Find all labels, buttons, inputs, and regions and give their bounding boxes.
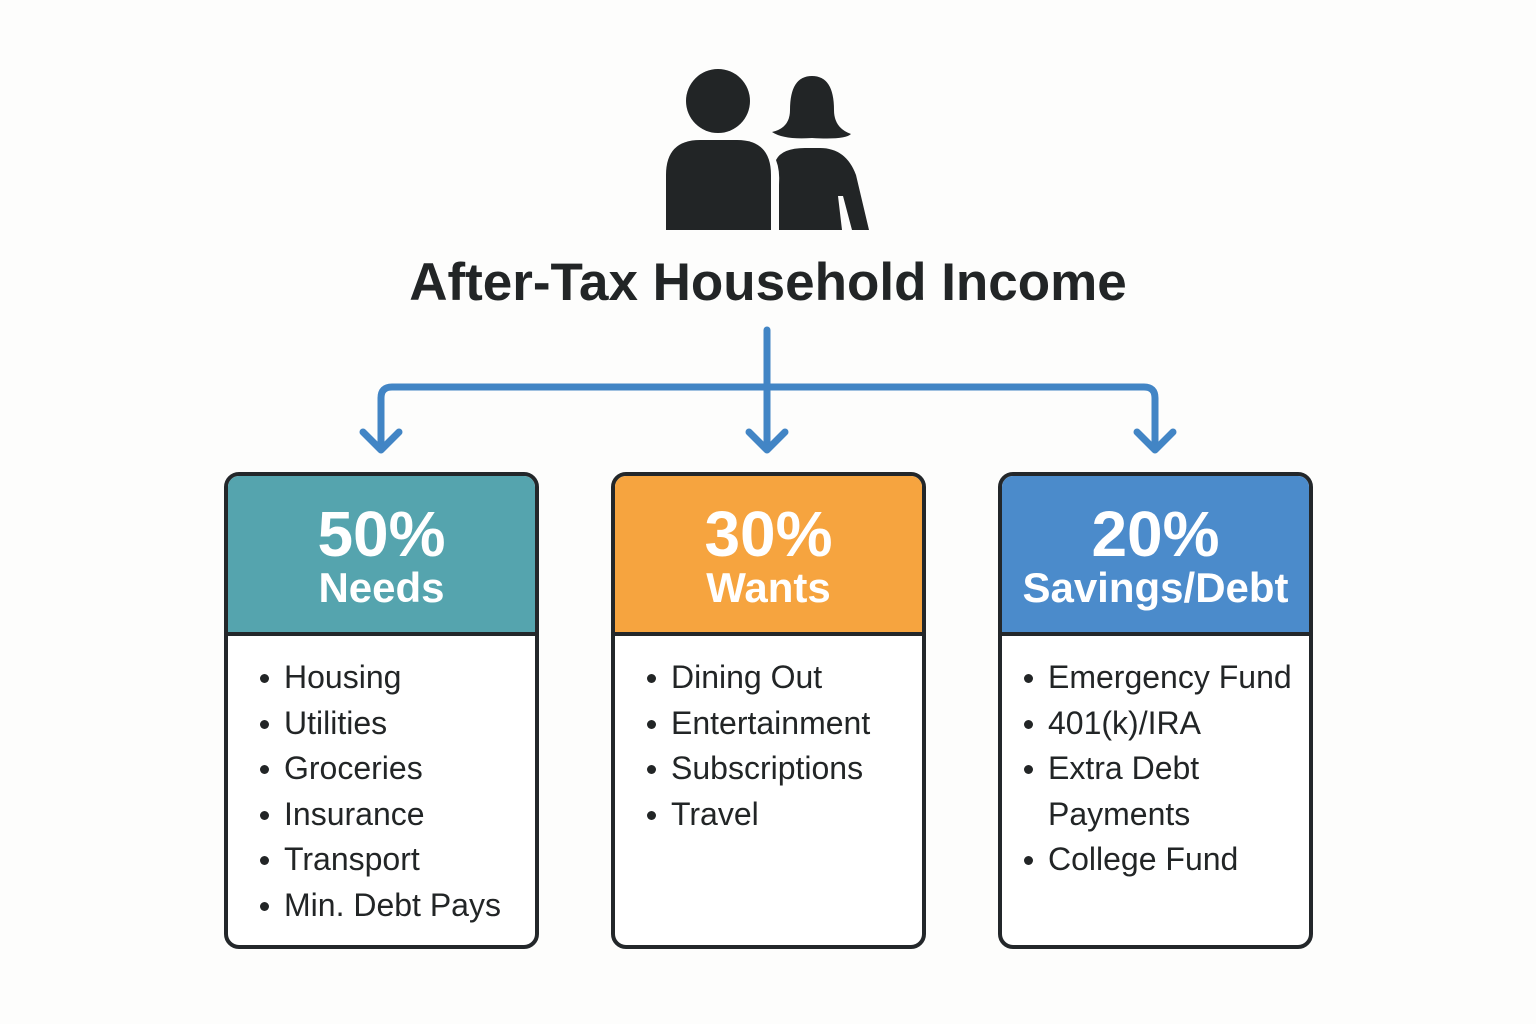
panel: needs: Needs — [318, 564, 445, 611]
panel: needs: Transport — [284, 841, 420, 877]
panel: needs: Housing — [284, 659, 401, 695]
panel: savings/debt: College Fund — [1048, 841, 1238, 877]
panel: wants — [611, 472, 926, 949]
panel: wants: Travel — [671, 796, 759, 832]
panel: needs: Insurance — [284, 796, 425, 832]
panel: needs: Groceries — [284, 750, 423, 786]
panel: wants: Subscriptions — [671, 750, 863, 786]
panel: savings/debt: 401(k)/IRA — [1048, 704, 1201, 740]
panel: needs: Utilities — [284, 704, 387, 740]
panel: savings/debt: Savings/Debt — [1022, 564, 1289, 611]
panel: savings/debt: 20% — [1091, 498, 1220, 570]
icon: household people — [666, 69, 869, 230]
panel: wants: 30% — [704, 498, 833, 570]
panel: needs: Min. Debt Pays — [284, 886, 501, 922]
title: After-Tax Household Income — [409, 253, 1127, 312]
panel: needs — [224, 472, 539, 949]
panel: savings/debt: Emergency Fund — [1048, 659, 1292, 695]
panel: savings/debt: Payments — [1048, 796, 1190, 832]
panel: wants: Dining Out — [671, 659, 822, 695]
panel: wants: Wants — [706, 564, 831, 611]
panel: savings/debt: Extra Debt — [1048, 750, 1199, 786]
panel: needs: 50% — [317, 498, 446, 570]
arrows: connector — [360, 326, 1176, 454]
panel: savings/debt — [998, 472, 1313, 949]
panel: wants: Entertainment — [671, 704, 870, 740]
